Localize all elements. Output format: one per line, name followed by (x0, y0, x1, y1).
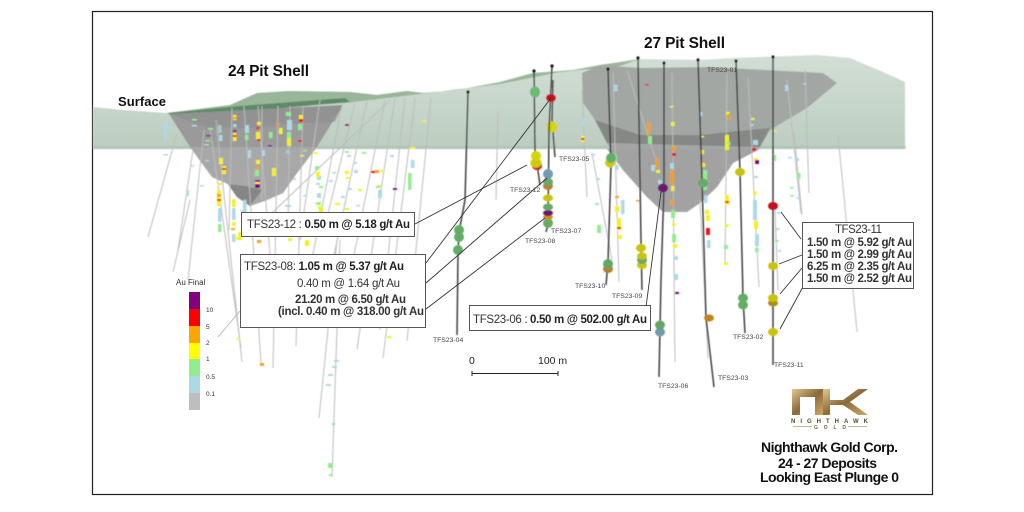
drill hole labels: TFS23-11 (774, 362, 804, 369)
callout: TFS23-08: (incl. 0.40 m @ 318.00 g/t Au (278, 306, 424, 318)
drill hole labels (433, 67, 804, 390)
drill hole labels: TFS23-06 (658, 383, 688, 390)
scale bar (469, 355, 567, 376)
pit shell: 24 (169, 105, 343, 206)
callout: TFS23-11: 1.50 m @ 2.52 g/t Au (807, 273, 912, 285)
drill hole labels: TFS23-03 (718, 375, 748, 382)
callout: TFS23-11: 1.50 m @ 2.99 g/t Au (807, 249, 912, 261)
drill hole labels: TFS23-09 (612, 293, 642, 300)
legend: Au Final: 5 (206, 324, 210, 331)
callout: TFS23-12: TFS23-12 : 0.50 m @ 5.18 g/t Au (247, 219, 410, 231)
heading: 24 Pit Shell: 24 Pit Shell (228, 63, 309, 80)
assay intervals: 27 deposit (581, 83, 808, 294)
terrain section (93, 55, 906, 477)
logo: Nighthawk Gold (791, 389, 869, 431)
callout: TFS23-11: TFS23-11 (835, 224, 882, 236)
legend: Au Final: Au Final (176, 278, 206, 287)
page frame (92, 12, 932, 494)
drill hole labels: TFS23-08 (525, 238, 555, 245)
hole TFS23-07 and TFS23-08 (543, 64, 556, 232)
hole TFS23-02 (734, 59, 748, 333)
green surface mound (167, 59, 640, 113)
callout: TFS23-12 (242, 212, 414, 236)
hole TFS23-05 (546, 80, 558, 157)
logo: Nighthawk Gold: GOLD (814, 425, 846, 431)
legend: Au Final: 0.1 (206, 391, 215, 398)
callout: TFS23-11: 6.25 m @ 2.35 g/t Au (807, 261, 912, 273)
hole TFS23-03 (696, 58, 714, 387)
title block: Nighthawk Gold Corp. (761, 439, 898, 455)
drill hole labels: TFS23-04 (433, 337, 463, 344)
background drill traces (148, 70, 857, 477)
scale bar: 100 m (538, 355, 567, 367)
logo: Nighthawk Gold: NIGHTHAWK (791, 419, 869, 425)
callout: TFS23-08: 0.40 m @ 1.64 g/t Au (297, 278, 400, 290)
callout: TFS23-06: TFS23-06 : 0.50 m @ 502.00 g/t Au (473, 314, 647, 326)
drill hole labels: TFS23-10 (575, 283, 605, 290)
heading: 27 Pit Shell: 27 Pit Shell (644, 35, 725, 52)
legend: Au Final: 2 (206, 340, 210, 347)
callout: TFS23-11 (802, 222, 914, 288)
lower terrain edge (93, 146, 906, 149)
drill hole labels: TFS23-02 (733, 334, 763, 341)
title block: 24 - 27 Deposits (778, 455, 877, 471)
drill hole labels: TFS23-07 (551, 228, 581, 235)
legend: Au Final: 1 (206, 356, 210, 363)
hole TFS23-04 (453, 90, 470, 335)
drill hole labels: TFS23-01 (707, 67, 737, 74)
drill hole labels: TFS23-12 (510, 187, 540, 194)
callout: TFS23-06 (470, 306, 650, 330)
hole TFS23-09 (636, 56, 647, 290)
hole TFS23-10 (603, 67, 616, 285)
pit shell: 27 (582, 65, 837, 212)
callout: TFS23-08: 21.20 m @ 6.50 g/t Au (295, 294, 406, 306)
legend: Au Final: 10 (206, 307, 214, 314)
title block (760, 439, 899, 485)
surface terrain body (93, 55, 905, 149)
legend: Au Final: 0.5 (206, 374, 215, 381)
callout: TFS23-11: 1.50 m @ 5.92 g/t Au (807, 237, 912, 249)
scale bar: 0 (469, 355, 475, 367)
hole TFS23-11 (768, 55, 778, 365)
hole TFS23-06 (655, 61, 668, 377)
dark surface band (167, 98, 350, 115)
callout: TFS23-08: TFS23-08: 1.05 m @ 5.37 g/t Au (244, 261, 404, 273)
callout leader lines (218, 98, 804, 337)
label: Surface: Surface (118, 94, 166, 109)
callout: TFS23-08 (240, 254, 426, 328)
assay intervals: 24 deposit (163, 112, 426, 476)
hole TFS23-12 (530, 69, 542, 185)
title block: Looking East Plunge 0 (760, 469, 899, 485)
drill holes with intercept discs (453, 55, 778, 387)
drill hole labels: TFS23-05 (559, 156, 589, 163)
legend: Au Final (176, 278, 215, 410)
